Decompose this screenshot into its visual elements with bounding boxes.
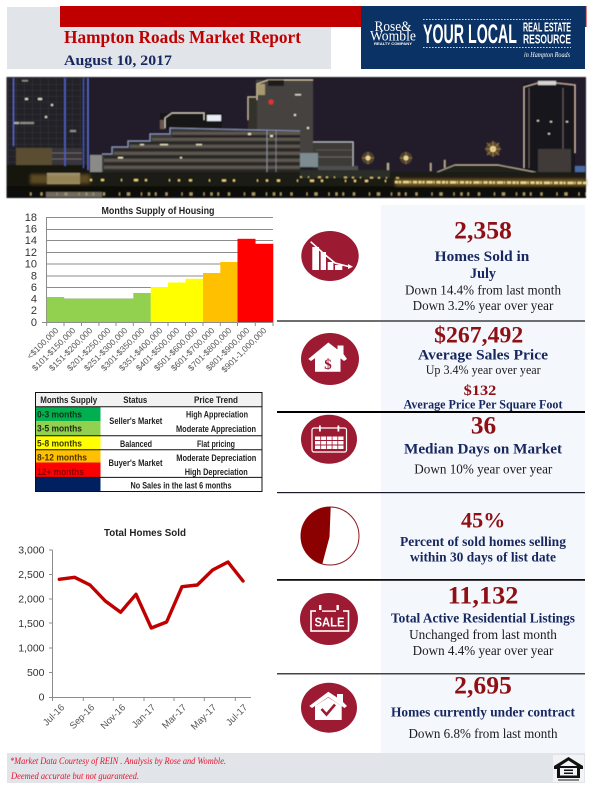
table text: Buyer's Market <box>108 458 162 468</box>
category labels: $501-$600,000 <box>152 325 200 373</box>
category labels: $801-$900,000 <box>204 325 252 373</box>
table text: 5-8 months <box>37 439 82 450</box>
left tower <box>7 78 89 179</box>
category labels: <$100,000 <box>25 325 61 361</box>
stat text: $132 <box>464 383 496 399</box>
table text: 8-12 months <box>37 453 87 464</box>
stat text: Homes Sold in <box>435 249 530 265</box>
icon: calendar <box>301 415 357 464</box>
icon: equal housing <box>553 755 584 782</box>
table text: Months Supply <box>40 395 98 406</box>
icon: house with dollar <box>301 333 359 385</box>
footer note <box>10 756 226 782</box>
category labels: $301-$350,000 <box>99 325 147 373</box>
line series <box>59 562 243 628</box>
y axis labels: 6 <box>31 282 37 294</box>
category labels: $901-1,000,000 <box>219 325 269 375</box>
stat text: 11,132 <box>448 583 518 610</box>
y axis labels: 8 <box>31 270 37 282</box>
stat text <box>391 673 575 741</box>
stat text <box>404 413 562 477</box>
table text: Price Trend <box>194 395 238 406</box>
x axis labels: Mar-17 <box>160 702 189 731</box>
table text: 0-3 months <box>37 410 82 421</box>
category labels: $401-$500,000 <box>134 325 182 373</box>
dividers <box>277 320 585 674</box>
photo: city skyline at night <box>6 77 586 198</box>
table text: Status <box>123 395 147 406</box>
logo banner: RESOURCE <box>523 32 571 46</box>
chart: total homes sold <box>18 528 251 733</box>
table text: Flat pricing <box>197 439 235 449</box>
stat text: 2,358 <box>454 217 512 244</box>
stat text <box>391 583 575 658</box>
x axis labels: Jan-17 <box>130 702 158 731</box>
table text: No Sales in the last 6 months <box>130 480 232 490</box>
stat text: Median Days on Market <box>404 442 562 458</box>
x axis <box>42 322 273 326</box>
x axis labels: Jul-17 <box>224 702 250 728</box>
stat text: 45% <box>461 508 505 533</box>
low building behind <box>300 142 358 174</box>
y axis labels: 2 <box>31 305 37 317</box>
panel: homes sold <box>301 217 561 313</box>
axes <box>49 550 251 701</box>
pavilion <box>387 160 550 175</box>
logo banner: REALTY COMPANY <box>374 41 412 46</box>
icon: sale sign: SALE <box>314 616 344 630</box>
table text: Moderate Appreciation <box>176 424 256 434</box>
category labels: $251-$300,000 <box>82 325 130 373</box>
y axis labels: 10 <box>25 258 37 270</box>
y axis labels: 500 <box>27 667 45 679</box>
stat text: within 30 days of list date <box>410 550 556 565</box>
right tower <box>524 81 585 176</box>
table text: Seller's Market <box>109 416 162 426</box>
panel backgrounds: stats column <box>381 205 585 753</box>
logo banner: Rose& <box>374 19 412 35</box>
stat text: Down 6.8% from last month <box>408 726 558 741</box>
footer note: Deemed accurate but not guaranteed. <box>10 772 139 782</box>
x axis labels <box>41 702 250 733</box>
category labels: $201-$250,000 <box>65 325 113 373</box>
panel: median days on market <box>301 413 562 477</box>
category labels: $601-$700,000 <box>169 325 217 373</box>
chart title: Months Supply of Housing <box>102 206 214 217</box>
y axis labels: 3,000 <box>18 544 45 556</box>
category labels: $701-$800,000 <box>186 325 234 373</box>
footer band <box>7 753 585 783</box>
panel: header title band <box>7 6 586 69</box>
stat text: Down 3.2% year over year <box>413 298 554 313</box>
stat text: 36 <box>471 413 496 440</box>
y axis labels: 4 <box>31 294 37 306</box>
table text: Moderate Depreciation <box>176 453 256 463</box>
table text <box>37 395 256 490</box>
stat text: Unchanged from last month <box>409 627 557 642</box>
stat text: Average Price Per Square Foot <box>404 398 563 412</box>
stat text <box>404 322 563 412</box>
logo banner: Womble <box>370 28 416 44</box>
stat text <box>405 217 561 313</box>
x axis labels: Jul-16 <box>41 702 67 728</box>
y axis labels: 14 <box>25 235 37 247</box>
hotel tower <box>248 80 313 165</box>
table text: Balanced <box>120 439 152 449</box>
stepped office building <box>102 113 300 173</box>
table: months supply legend <box>36 392 262 492</box>
logo banner: in Hampton Roads <box>524 51 570 59</box>
y axis labels: 0 <box>31 317 37 329</box>
date: August 10, 2017 <box>64 53 173 69</box>
table text: High Depreciation <box>185 467 248 477</box>
icon: declining bar chart <box>301 231 359 281</box>
stat text: Average Sales Price <box>418 347 548 363</box>
panel: under contract <box>301 673 575 741</box>
bars <box>47 239 273 322</box>
y axis labels: 0 <box>39 692 45 704</box>
icon: house with dollar: $ <box>324 357 332 373</box>
stat text: 2,695 <box>454 673 512 700</box>
gridlines and y axis <box>46 217 273 322</box>
icon: pie chart 45% <box>301 507 359 565</box>
x axis labels: Sep-16 <box>68 702 97 732</box>
shoreline <box>7 170 586 198</box>
stat text: Up 3.4% year over year <box>426 363 542 377</box>
panel: percent selling within 30 days <box>301 507 566 565</box>
table text: 12+ months <box>37 467 84 478</box>
y axis labels: 2,000 <box>18 594 45 606</box>
title: Hampton Roads Market Report <box>64 27 301 47</box>
y axis labels <box>25 212 37 329</box>
footer note: *Market Data Courtesy of REIN . Analysis by Rose and Womble. <box>10 756 226 767</box>
stat text: Percent of sold homes selling <box>400 534 566 549</box>
small white building <box>90 155 102 173</box>
stat text: Homes currently under contract <box>391 705 575 720</box>
category labels: $351-$400,000 <box>117 325 165 373</box>
y axis labels: 16 <box>25 224 37 236</box>
panel: average sales price <box>301 322 563 412</box>
y axis labels: 12 <box>25 247 37 259</box>
category labels: $151-$200,000 <box>47 325 95 373</box>
icon: sale sign <box>300 593 358 645</box>
y axis labels: 18 <box>25 212 37 224</box>
x axis labels: May-17 <box>189 702 219 733</box>
logo banner <box>361 6 585 69</box>
icon: house with check <box>301 683 357 733</box>
y axis labels: 2,500 <box>18 569 45 581</box>
stat text: Total Active Residential Listings <box>391 611 575 626</box>
logo banner: YOUR LOCAL <box>423 19 517 49</box>
stat text: Down 14.4% from last month <box>405 282 561 297</box>
y axis labels: 1,000 <box>18 642 45 654</box>
panel: active listings <box>300 583 575 658</box>
chart: months supply of housing <box>25 206 273 375</box>
table text: 3-5 months <box>37 424 82 435</box>
stat text <box>400 508 566 565</box>
chart title: Total Homes Sold <box>104 528 186 539</box>
x axis labels: Nov-16 <box>99 702 128 732</box>
y axis labels: 1,500 <box>18 618 45 630</box>
category labels <box>25 325 269 375</box>
stat text: Down 4.4% year over year <box>413 643 554 658</box>
y axis labels <box>18 544 45 704</box>
table text: High Appreciation <box>186 410 248 420</box>
category labels: $101-$150,000 <box>30 325 78 373</box>
stat text: July <box>470 266 496 282</box>
stat text: Down 10% year over year <box>414 462 553 477</box>
stat text: $267,492 <box>434 322 523 348</box>
street light flares <box>362 141 501 164</box>
